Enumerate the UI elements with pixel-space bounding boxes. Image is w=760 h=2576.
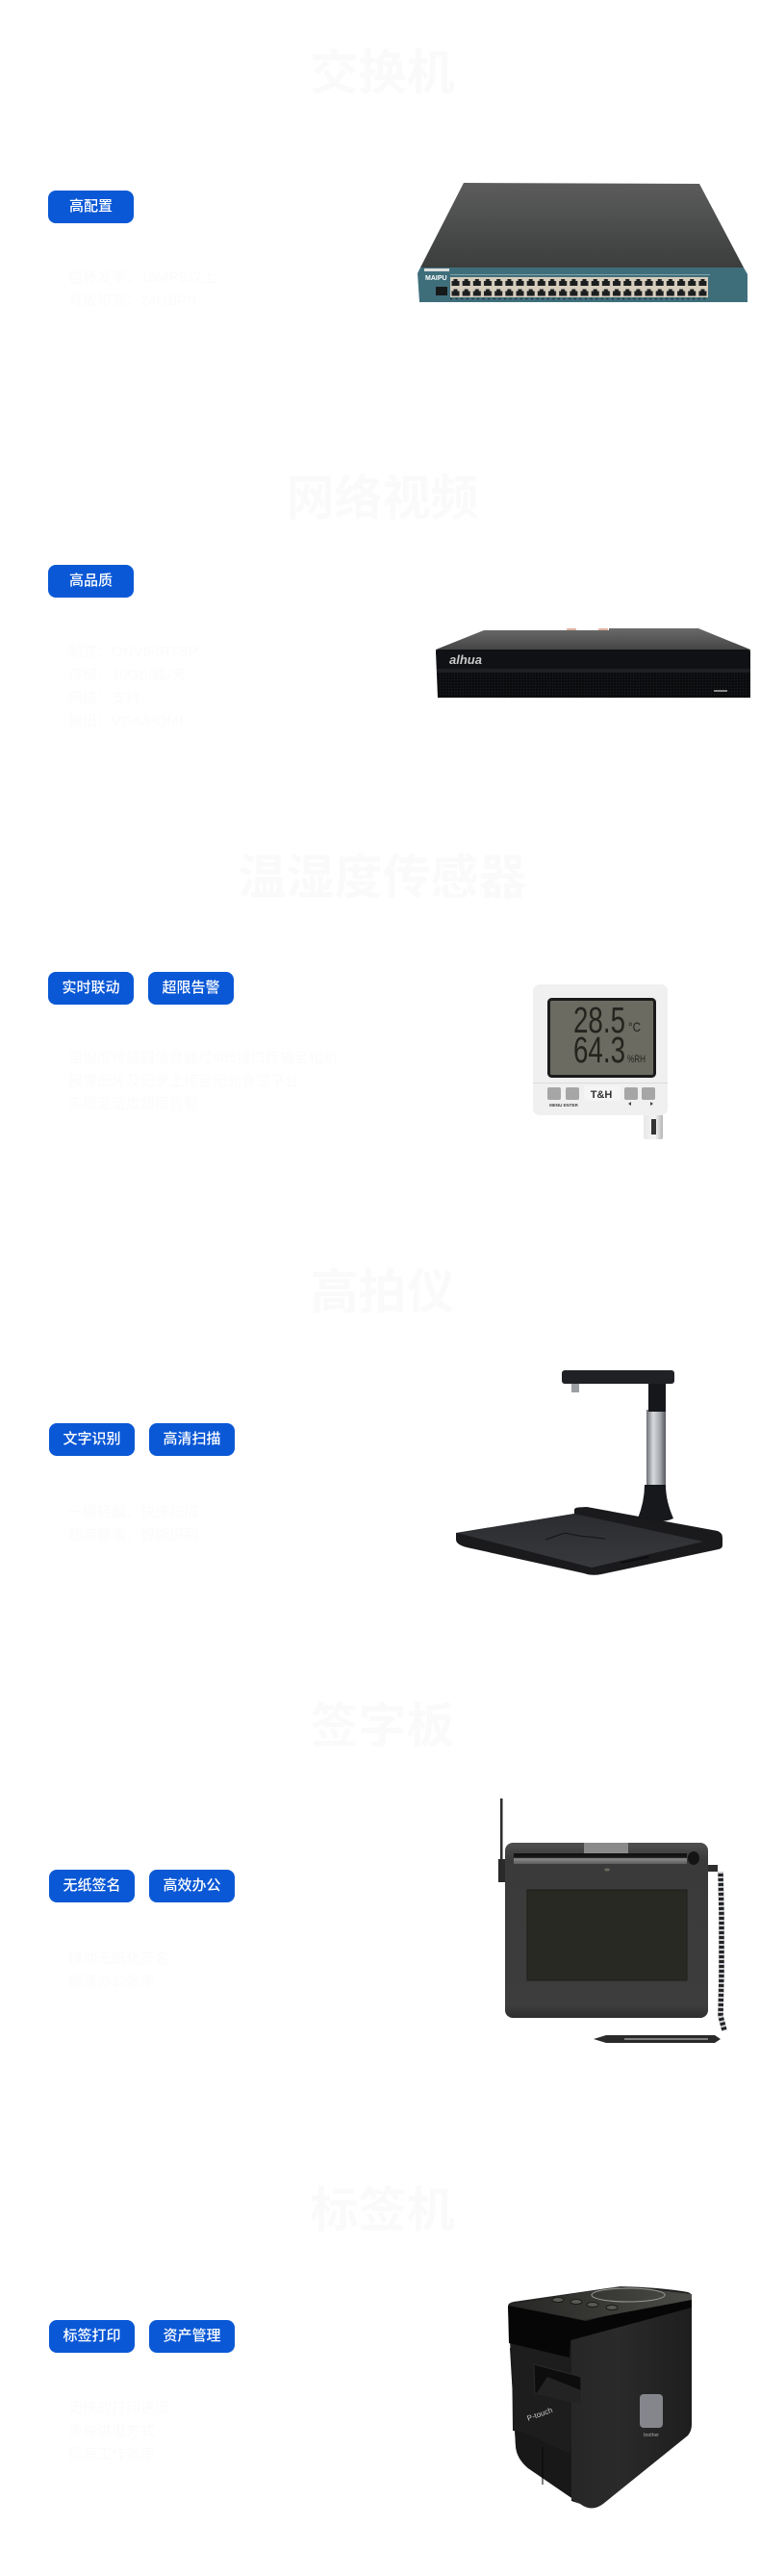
printer silhouette: [508, 2286, 692, 2508]
title: 交换机: [310, 46, 454, 100]
panel: label printer: [49, 2183, 692, 2508]
text block: camera description: [68, 1501, 198, 1547]
tag: real-time linkage: [48, 972, 134, 1005]
icon: temperature and humidity sensor: 64.3: [573, 1031, 625, 1071]
tag: HD scanning: [149, 1423, 235, 1456]
icon: label printer: [508, 2286, 692, 2508]
title: 高拍仪: [310, 1265, 454, 1319]
title: 标签机: [310, 2183, 454, 2237]
icon: label printer: P-touch: [526, 2406, 554, 2423]
tag: paperless signing: 无纸签名: [63, 1877, 121, 1894]
text block: sensor description: 温湿度传感器信息通过485接口传输至相机: [68, 1050, 338, 1066]
icon: network switch: [418, 183, 747, 302]
tag: high quality: 高品质: [69, 573, 113, 589]
panel: signature pad: [49, 1699, 727, 2043]
camera base: [456, 1507, 722, 1575]
icon: document camera: [456, 1370, 722, 1575]
text block: printer description: 提高工作效率: [68, 2446, 155, 2462]
text block: printer description: 多种供电方式: [68, 2423, 155, 2439]
icon: signature pad: [498, 1798, 727, 2043]
panel: document camera: [49, 1265, 722, 1575]
text block: sensor description: 报警图片及记录上传至阳光食堂平台: [68, 1073, 299, 1089]
tag: over-limit alarm: [148, 972, 234, 1005]
text block: recorder specs: [68, 641, 198, 733]
tag: text recognition: 文字识别: [63, 1431, 121, 1447]
text block: recorder specs: 网络：支持: [68, 690, 140, 706]
icon: temperature and humidity sensor: °C: [628, 1019, 641, 1034]
tag: label printing: [49, 2320, 135, 2353]
tag: high configuration: [48, 191, 134, 223]
tag: paperless signing: [49, 1870, 135, 1902]
tag: real-time linkage: 实时联动: [62, 980, 119, 996]
tag: HD scanning: 高清扫描: [163, 1431, 221, 1447]
title: 网络视频: [287, 472, 479, 525]
text block: pad description: [68, 1948, 169, 1994]
tag: text recognition: [49, 1423, 135, 1456]
text block: switch specs: 背板带宽：24GBPS: [68, 293, 196, 309]
text block: pad description: 移动无纸化签名: [68, 1951, 169, 1967]
text block: camera description: 超高像素，智能识别: [68, 1527, 198, 1543]
text block: recorder specs: 输出：VGA/HDMI: [68, 713, 183, 729]
icon: temperature and humidity sensor: 28.5: [573, 1001, 625, 1041]
tag: over-limit alarm: 超限告警: [162, 980, 219, 996]
text block: switch specs: [68, 267, 216, 313]
text block: camera description: 一键轻触，快速扫描: [68, 1504, 198, 1520]
tag: asset management: 资产管理: [163, 2328, 221, 2344]
icon: video recorder: [436, 628, 750, 698]
title: 温湿度传感器: [239, 851, 527, 905]
text block: recorder specs: 制式：ONVIF/RTSP: [68, 644, 198, 660]
text block: pad description: 提高办公效率: [68, 1974, 155, 1990]
tag: high configuration: 高配置: [69, 198, 113, 215]
icon: temperature and humidity sensor: T&H: [591, 1089, 612, 1101]
door panel: [512, 2340, 571, 2452]
icon: temperature and humidity sensor: MENU ENTER: [549, 1103, 579, 1108]
title: 签字板: [310, 1699, 454, 1753]
icon: temperature and humidity sensor: %RH: [627, 1054, 646, 1065]
tag: asset management: [149, 2320, 235, 2353]
text block: recorder specs: 存储：10GB/路/天: [68, 667, 186, 683]
text block: sensor description: 实现温湿度超限告警: [68, 1096, 198, 1112]
icon: temperature and humidity sensor: [533, 984, 668, 1139]
top black band: [508, 2294, 692, 2358]
panel: switch: [48, 46, 747, 309]
tag: efficient office: 高效办公: [163, 1877, 221, 1894]
panel: network video recorder: [48, 472, 750, 729]
icon: video recorder: alhua: [449, 652, 482, 667]
lower left panel: [510, 2348, 580, 2504]
panel: temperature and humidity sensor: [48, 851, 668, 1139]
text block: sensor description: [68, 1047, 338, 1116]
icon: network switch: MAIPU: [425, 275, 447, 282]
text block: switch specs: 包转发率：18MPS以上: [68, 269, 216, 286]
tag: label printing: 标签打印: [63, 2328, 121, 2344]
tag: efficient office: [149, 1870, 235, 1902]
text block: printer description: 更快的打印速度: [68, 2400, 169, 2416]
tag: high quality: [48, 565, 134, 598]
text block: printer description: [68, 2397, 169, 2466]
icon: label printer: brother: [644, 2433, 659, 2438]
